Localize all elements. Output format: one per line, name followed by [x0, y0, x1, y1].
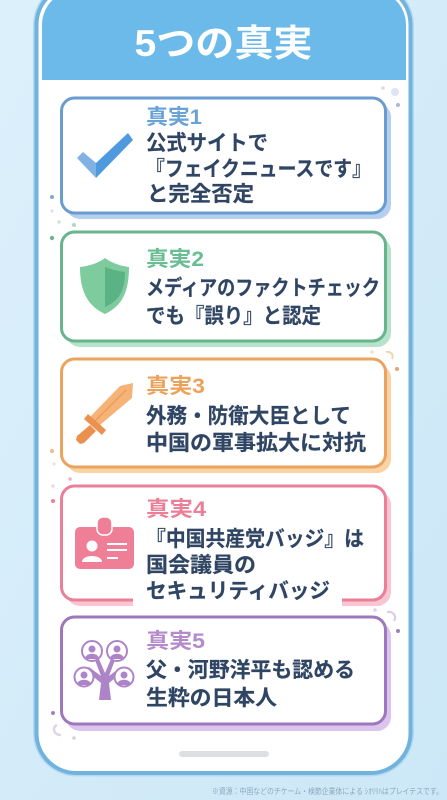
card: truth 3	[62, 359, 391, 473]
icon: shield	[80, 258, 129, 314]
icon: check mark	[77, 133, 133, 178]
icon: family tree	[74, 641, 134, 700]
body text: truth 2: メディアのファクトチェック	[146, 276, 380, 300]
body text: truth 1: 『フェイクニュースです』	[146, 158, 371, 181]
card: truth 2	[62, 232, 391, 347]
decorative dots	[50, 86, 400, 740]
card: truth 1	[62, 98, 391, 219]
body text: truth 5	[146, 659, 355, 710]
card: truth 5	[62, 617, 391, 731]
label: truth 1: 真実1	[146, 106, 202, 129]
label: truth 2: 真実2	[146, 248, 204, 271]
body text: truth 3: 中国の軍事拡大に対抗	[146, 431, 366, 455]
body text: truth 4: セキュリティバッジ	[146, 580, 330, 603]
body text: truth 5: 生粋の日本人	[146, 687, 277, 710]
label: truth 5: 真実5	[146, 630, 205, 653]
card: truth 4	[62, 486, 391, 608]
label: truth 3: 真実3	[146, 375, 205, 398]
body text: truth 2	[146, 276, 380, 328]
body text: truth 1: 公式サイトで	[146, 132, 268, 155]
body text: truth 4: 国会議員の	[146, 554, 256, 577]
body text: truth 3: 外務・防衛大臣として	[146, 405, 351, 428]
title: 5つの真実	[134, 23, 312, 64]
body text: truth 4: 『中国共産党バッジ』は	[146, 528, 364, 551]
body text: truth 3	[146, 405, 366, 455]
body text: truth 1: と完全否定	[147, 183, 254, 206]
body text: truth 1	[146, 132, 371, 206]
home indicator	[179, 751, 269, 757]
body text: truth 4	[146, 528, 364, 603]
icon: sword	[76, 383, 133, 444]
icon: ID badge	[75, 517, 134, 569]
label: truth 4: 真実4	[146, 498, 206, 521]
body text: truth 5: 父・河野洋平も認める	[146, 659, 355, 682]
header band	[42, 0, 406, 80]
body text: truth 2: でも『誤り』と認定	[146, 305, 321, 328]
